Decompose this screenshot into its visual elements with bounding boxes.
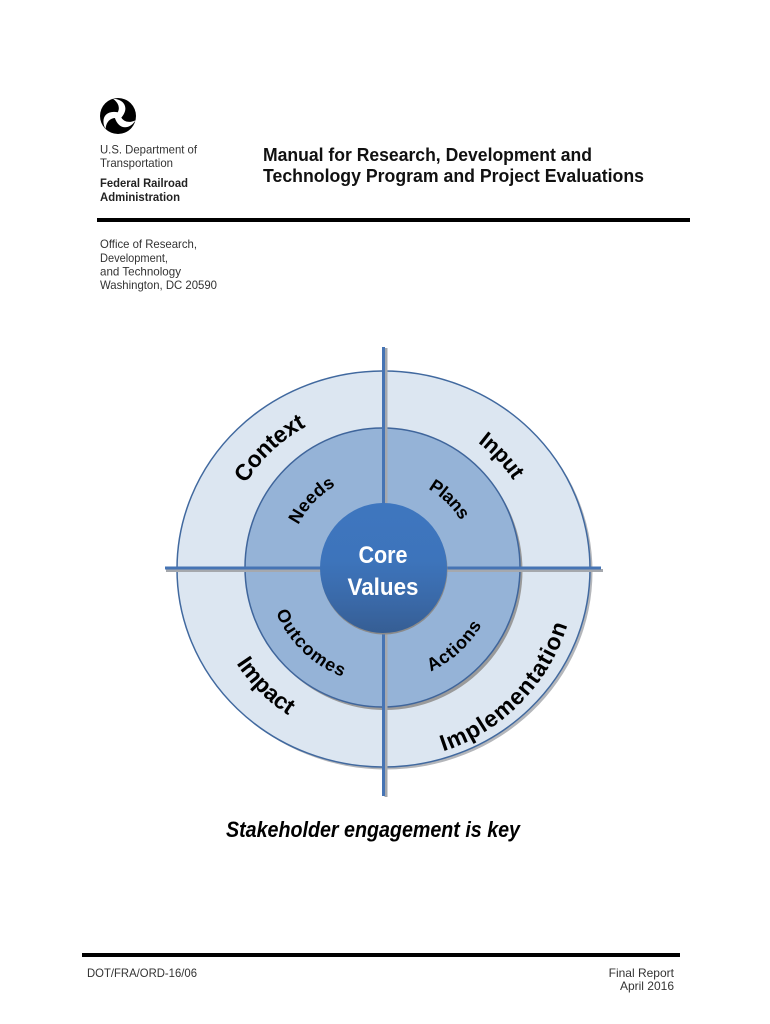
outer ring: context, input, implementation, impact <box>177 371 592 770</box>
text: department name: U.S. Department of <box>100 142 198 156</box>
label: implementation: Implementation <box>439 624 567 751</box>
caption: stakeholder engagement: Stakeholder engagement is key <box>226 817 522 842</box>
label: input: Input <box>479 432 524 480</box>
label: core values: Values <box>348 574 418 601</box>
text: agency name: Administration <box>100 190 180 204</box>
label: needs: Needs <box>288 479 334 524</box>
text: office address: Washington, DC 20590 <box>100 278 217 292</box>
bottom rule <box>82 953 680 957</box>
text: office address: and Technology <box>100 264 181 278</box>
core circle <box>320 503 448 634</box>
text: office address: Office of Research, <box>100 237 197 251</box>
text: report type and date <box>609 966 675 993</box>
title <box>263 145 644 186</box>
top rule <box>97 218 690 222</box>
chart: concentric evaluation wheel <box>165 347 603 797</box>
text: office address: Development, <box>100 251 168 265</box>
label: actions: Actions <box>429 622 480 672</box>
label: outcomes: Outcomes <box>278 610 344 676</box>
text: agency name <box>100 176 188 204</box>
cross axis lines <box>165 347 603 797</box>
text: report type and date: Final Report <box>609 966 675 980</box>
inner ring: needs, plans, actions, outcomes <box>245 428 522 710</box>
title: Manual for Research, Development and <box>263 145 592 165</box>
icon: DOT triskelion logo <box>99 98 136 134</box>
text: report type and date: April 2016 <box>620 979 674 993</box>
label: core values: Core <box>358 542 408 569</box>
text: department name: Transportation <box>100 156 173 170</box>
text: report number: DOT/FRA/ORD-16/06 <box>87 966 197 980</box>
label: plans: Plans <box>429 479 467 519</box>
label: impact: Impact <box>237 656 295 715</box>
label: core values <box>348 542 418 601</box>
text: office address <box>100 237 217 292</box>
text: agency name: Federal Railroad <box>100 176 188 190</box>
text: department name <box>100 142 198 170</box>
label: context: Context <box>236 414 306 480</box>
title: Technology Program and Project Evaluations <box>263 166 644 186</box>
